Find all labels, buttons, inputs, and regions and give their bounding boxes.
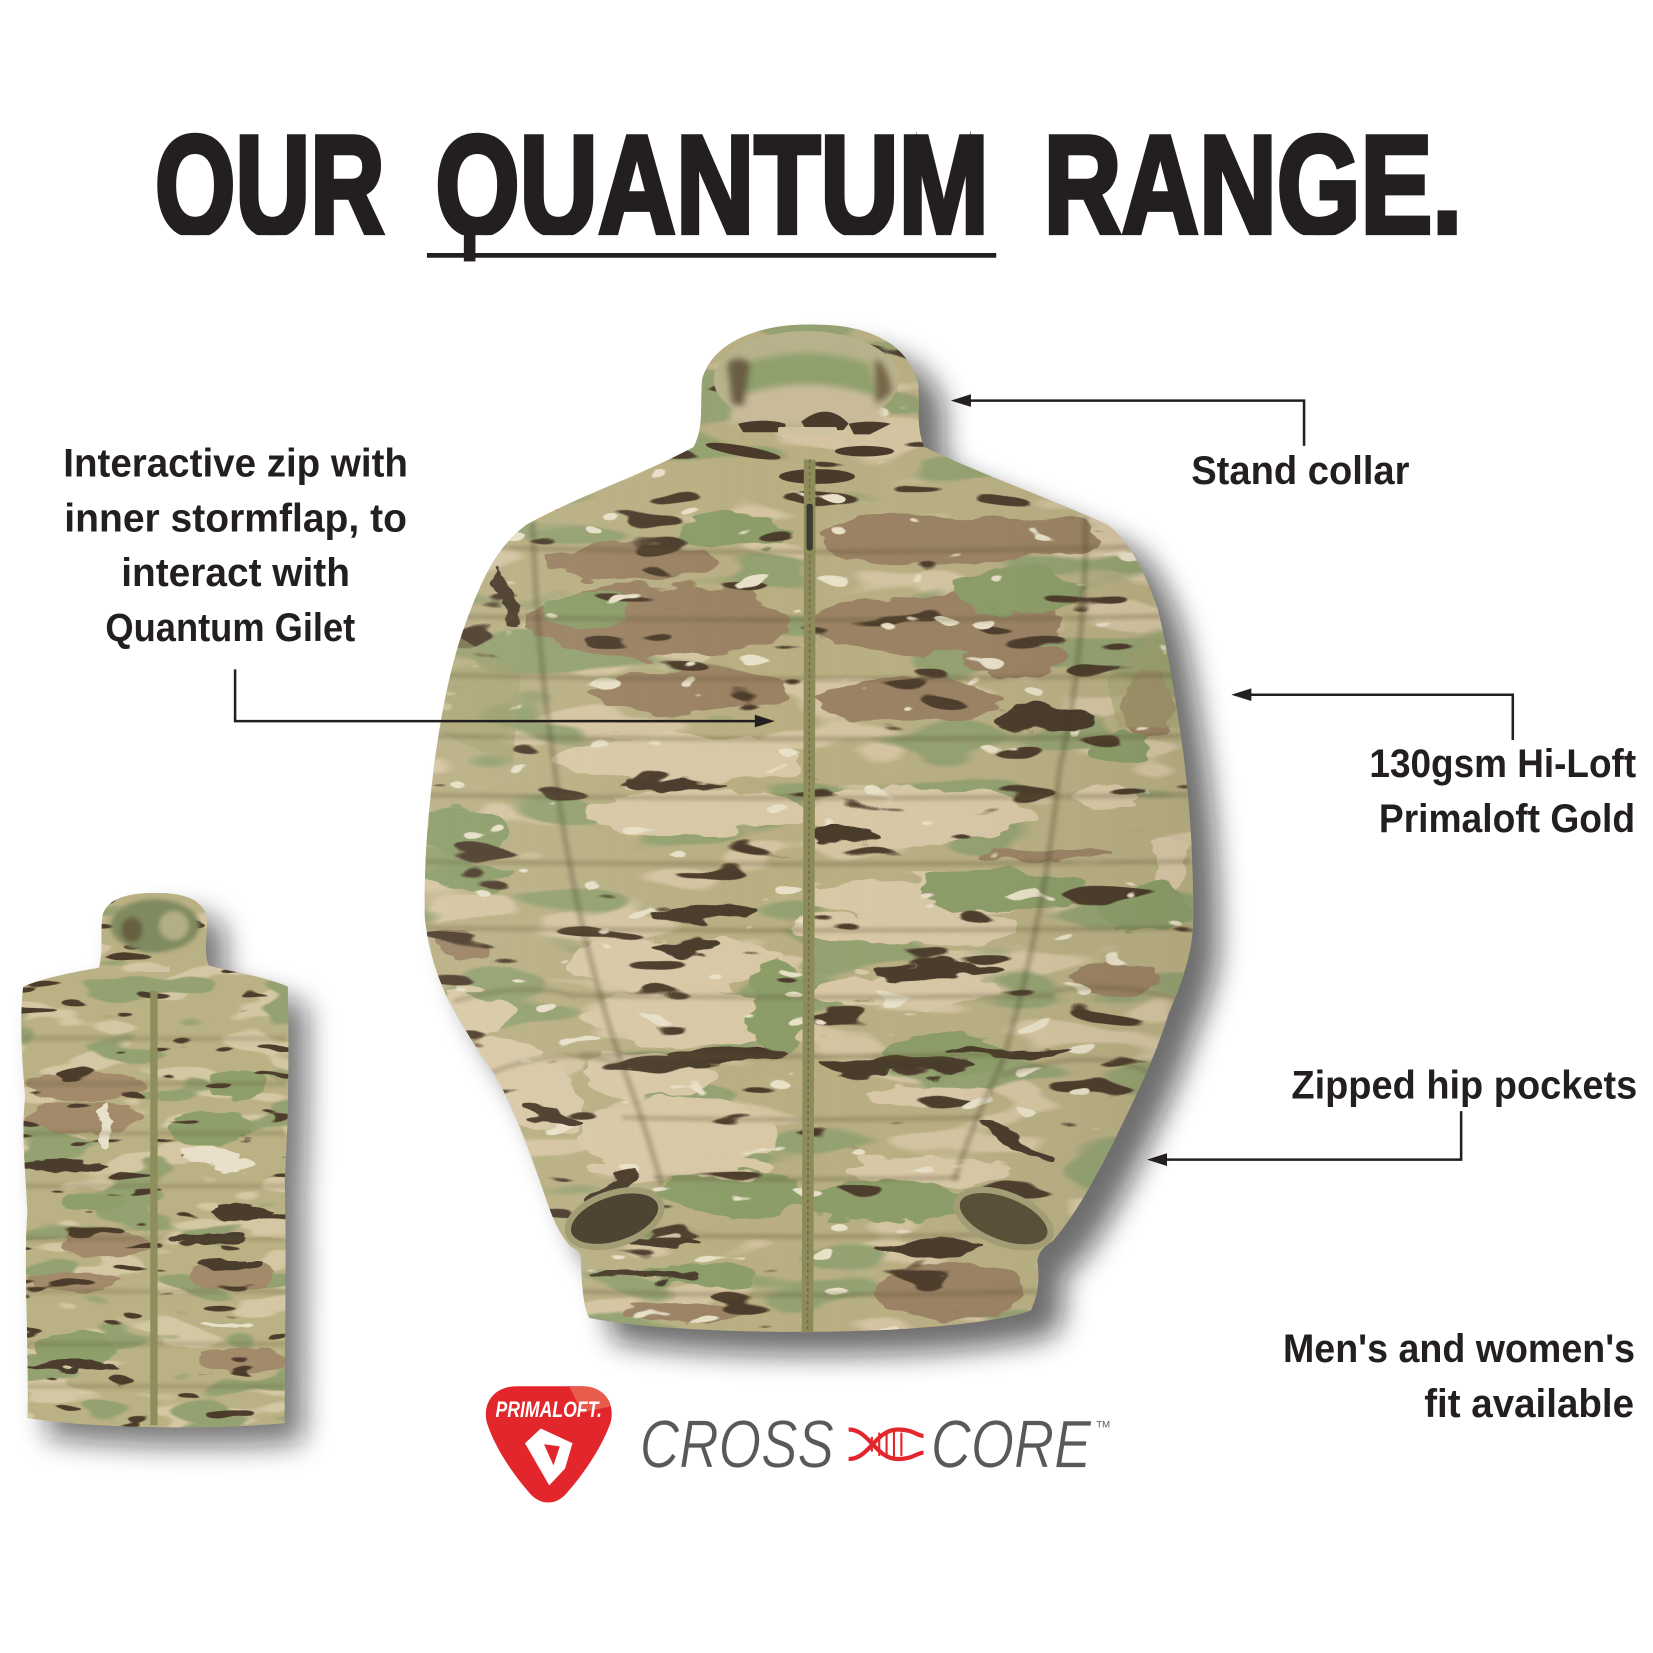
label: interactive zip: Quantum Gilet: [105, 606, 355, 650]
jacket drop shadow: [450, 348, 1219, 1355]
jacket cuffs: [561, 1178, 1059, 1259]
logo: Primaloft shield: [486, 1386, 612, 1503]
logo: Primaloft shield: PRIMALOFT.: [495, 1397, 602, 1422]
gilet centre zip: [150, 991, 157, 1425]
jacket centre zip: [806, 460, 813, 1333]
label: zipped hip pockets: Zipped hip pockets: [1291, 1063, 1637, 1107]
gilet: Quantum gilet in camouflage: [0, 875, 316, 1446]
logo: Cross Core wordmark: CROSS: [640, 1407, 834, 1482]
label: interactive zip: interact with: [121, 551, 350, 595]
gilet collar interior: [111, 899, 199, 952]
label: fit: [1283, 1327, 1635, 1426]
label: fit: Men's and women's: [1283, 1327, 1635, 1371]
label: insulation: 130gsm Hi-Loft: [1369, 742, 1636, 786]
title: OUR: [155, 106, 385, 264]
label: interactive zip: inner stormflap, to: [64, 496, 407, 540]
arrow: insulation: [1231, 688, 1513, 740]
label: interactive zip: Interactive zip with: [63, 442, 408, 486]
gilet quilting seams: [23, 1038, 287, 1386]
sleeve and body junction shading: [532, 517, 1086, 1186]
icon: DNA helix: [849, 1430, 923, 1459]
arrow: zip label to jacket chest: [235, 669, 775, 727]
logo: Cross Core wordmark: TM: [1096, 1419, 1110, 1430]
arrow: stand collar: [951, 394, 1304, 446]
label: insulation: Primaloft Gold: [1379, 797, 1635, 841]
title: [157, 130, 1457, 262]
jacket collar opening: [714, 331, 899, 434]
label: interactive zip: [63, 442, 408, 650]
jacket collar front marks: [705, 439, 894, 484]
title: RANGE.: [1044, 106, 1462, 264]
gilet drop shadow: [40, 912, 307, 1446]
label: insulation: [1369, 742, 1636, 841]
label: fit: fit available: [1424, 1382, 1634, 1426]
jacket quilting seams: [422, 545, 1191, 1295]
label: stand collar: Stand collar: [1191, 449, 1409, 493]
title: QUANTUM: [435, 106, 989, 264]
gilet collar label: [142, 967, 170, 972]
jacket sleeve patches: [439, 635, 1186, 764]
main jacket: Quantum jacket in camouflage: [401, 306, 1223, 1360]
logo: Cross Core wordmark: [640, 1407, 1110, 1482]
logo: Cross Core wordmark: CORE: [931, 1407, 1092, 1482]
arrow: hip pockets: [1147, 1111, 1461, 1166]
